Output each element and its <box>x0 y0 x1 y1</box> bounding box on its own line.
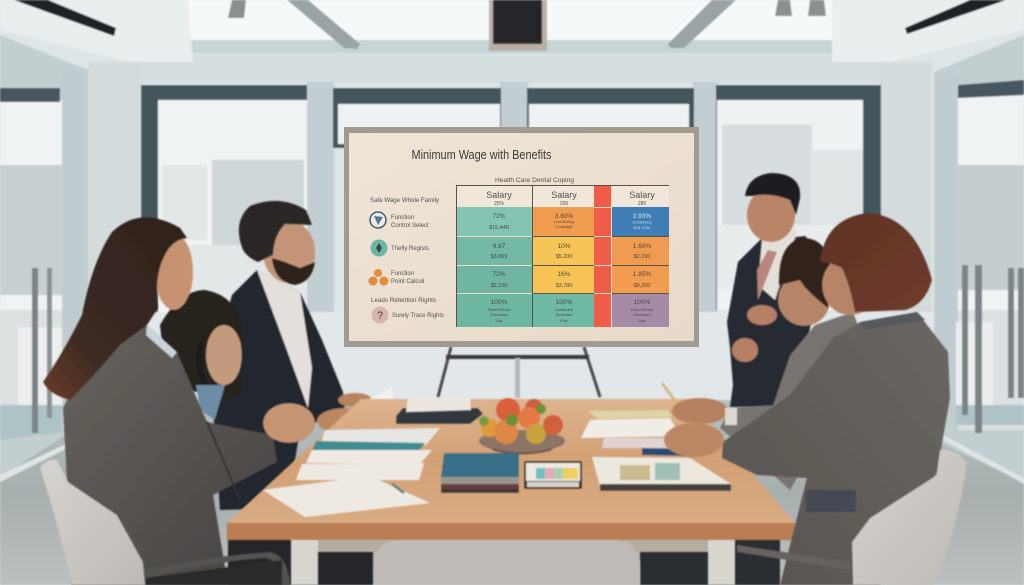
benefit label 1: Control Select <box>391 223 429 229</box>
benefit label 3: Point Calculi <box>391 279 424 285</box>
skylight <box>185 0 835 42</box>
table text: Fixed Period <box>488 307 510 312</box>
ceiling projector <box>489 0 547 51</box>
blue notebooks <box>441 453 519 493</box>
red column <box>594 186 611 327</box>
right papers <box>581 410 680 448</box>
table text: $5,200 <box>556 254 572 260</box>
ceiling left <box>0 0 193 62</box>
table text: 3.60% <box>555 213 573 220</box>
table text: Continued <box>555 307 573 312</box>
table text: Salary <box>551 190 577 200</box>
table text: 16% <box>557 271 571 278</box>
table text: $3,869 <box>491 254 507 260</box>
table text: $18.10/hr <box>634 225 651 230</box>
easel <box>438 347 600 398</box>
icon: shield badge <box>370 212 386 228</box>
table text: Salary <box>629 190 655 200</box>
table text: 285 <box>638 201 646 207</box>
table text: Disclosed <box>633 312 651 317</box>
table text: $3,780 <box>556 283 572 289</box>
table text: 25% <box>494 201 505 207</box>
table text: Disclosed <box>490 312 508 317</box>
table heading: Health Care Dental Coping <box>495 177 574 184</box>
benefit table <box>456 185 669 327</box>
table text: 2.93% <box>633 213 651 220</box>
icon: teal drop <box>370 240 388 256</box>
column 2 cells <box>533 207 594 327</box>
table text: 1.85% <box>633 271 651 278</box>
loose papers <box>263 450 432 517</box>
floor <box>0 400 1024 585</box>
spotlights <box>228 0 826 18</box>
tablet <box>524 461 582 489</box>
window 4 <box>716 85 881 310</box>
benefit label 2: Thefly Regists <box>391 246 429 252</box>
table text: 100% <box>634 299 651 306</box>
table text: 10% <box>557 243 571 250</box>
row dividers <box>457 186 612 327</box>
person: woman in back right <box>672 238 865 490</box>
window 1 <box>141 85 307 320</box>
row heading: Safe Wage Whole Family <box>370 197 440 204</box>
presentation board <box>344 127 699 347</box>
person: woman front left <box>40 217 315 585</box>
board surface <box>349 133 694 341</box>
person: seated bearded man <box>213 201 398 510</box>
under-table legs <box>228 530 780 585</box>
table grid backing <box>456 185 669 327</box>
table text: $15,440 <box>489 225 509 231</box>
table text: 100% <box>556 299 573 306</box>
table text: 100% <box>491 299 508 306</box>
spiral notebook <box>592 457 731 491</box>
person: woman front right <box>664 213 967 585</box>
window 2 <box>333 88 501 148</box>
column 3 cells <box>612 207 669 327</box>
table text: 200 <box>560 201 568 207</box>
table text: $2,190 <box>634 254 650 260</box>
window 3 <box>527 88 694 148</box>
table text: Low-Rating <box>554 219 574 224</box>
teal folder <box>312 428 440 452</box>
heading: Minimum Wage with Benefits <box>412 147 552 162</box>
table top <box>227 399 795 523</box>
office chair left <box>40 460 290 585</box>
ceiling right <box>832 0 1024 62</box>
table text: $2,100 <box>491 283 507 289</box>
icon: question badge: ? <box>377 310 383 322</box>
glass door left <box>0 35 88 482</box>
pen <box>392 484 404 493</box>
header row <box>457 186 669 207</box>
table text: 72% <box>492 213 506 220</box>
stacked papers <box>396 398 483 424</box>
table text: Schedule <box>556 312 573 317</box>
pencil <box>662 383 678 405</box>
glass door right <box>934 35 1024 484</box>
lower wall <box>88 312 934 402</box>
person: seated woman with glasses <box>160 290 242 420</box>
ceiling beam and upper wall <box>130 40 890 83</box>
woman body <box>43 217 315 585</box>
table text: Coverage <box>555 224 573 229</box>
board frame <box>344 127 699 347</box>
fruit bowl <box>479 398 565 454</box>
air vent right <box>905 0 1006 34</box>
table text: Pay <box>561 318 567 323</box>
air vent left <box>14 0 116 36</box>
office chair right <box>737 450 967 585</box>
table text: Underlying <box>632 220 652 224</box>
column 1 cells <box>457 207 532 327</box>
light bar right <box>668 0 736 48</box>
icon: question badge <box>372 306 388 324</box>
table text <box>486 190 655 323</box>
table text: Day <box>495 318 503 323</box>
benefit label 4: Surely Trace Rights <box>392 313 444 319</box>
table text: $9,200 <box>634 283 650 289</box>
woman body <box>664 213 950 585</box>
table legs <box>291 540 735 585</box>
icon: orange people <box>368 269 388 286</box>
light bar left <box>287 0 360 49</box>
person: standing presenter <box>727 173 815 407</box>
benefit label 1: Function <box>391 215 414 221</box>
benefit label 3: Function <box>391 271 414 277</box>
section label: Leads Retention Rights <box>371 298 436 304</box>
table <box>227 383 795 585</box>
blue pen case <box>642 448 698 456</box>
table text: 4.87 <box>493 243 506 250</box>
table text: 72% <box>492 271 506 278</box>
table edge <box>227 523 795 540</box>
front chair <box>375 540 640 585</box>
table text: Day <box>638 318 646 323</box>
table text: 1.60% <box>633 243 651 250</box>
table text: Salary <box>486 190 512 200</box>
wall columns <box>88 62 932 402</box>
table text: Fixed Period <box>631 307 653 312</box>
